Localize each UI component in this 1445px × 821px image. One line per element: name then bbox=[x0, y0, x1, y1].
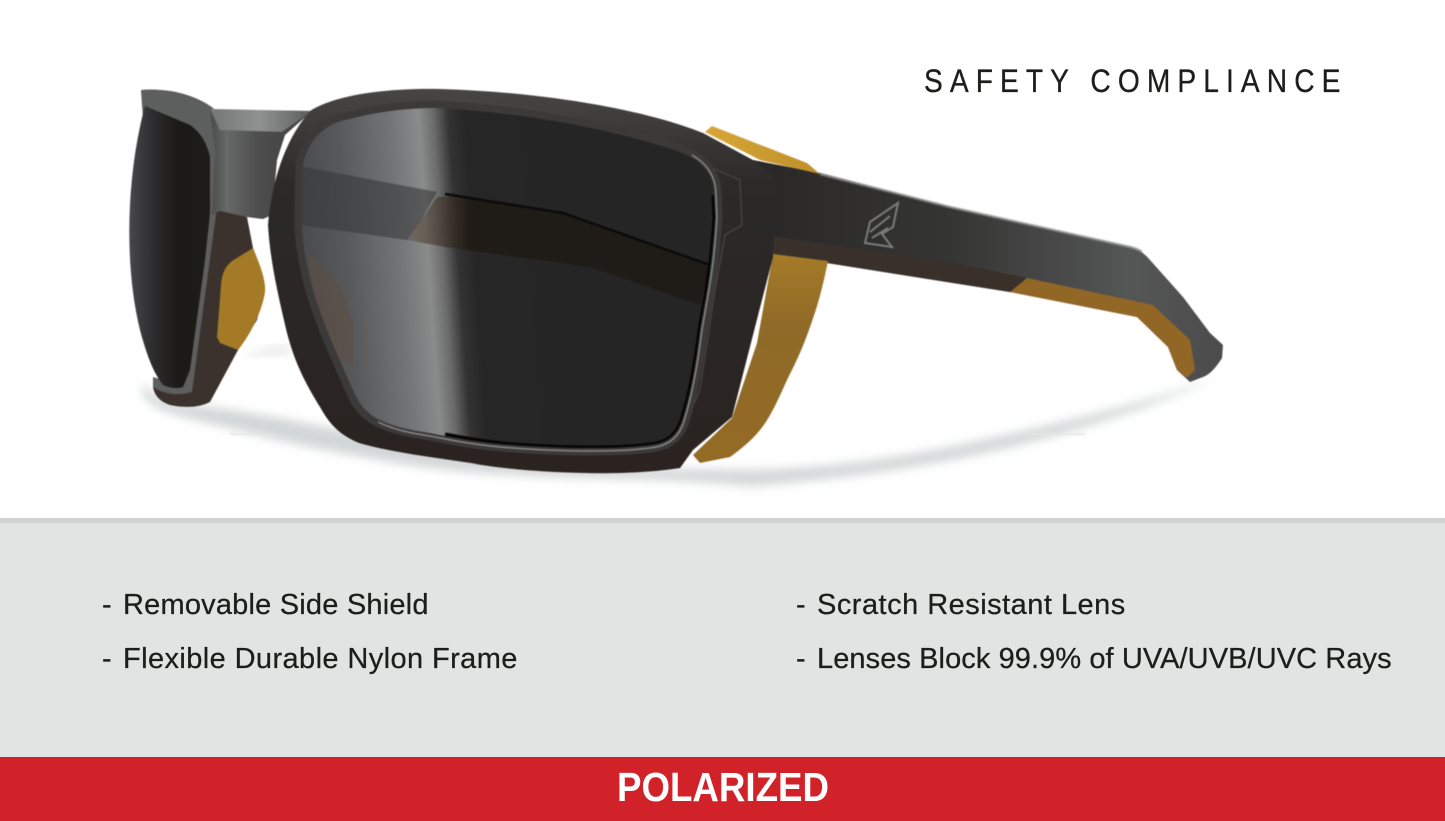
frame groove bbox=[430, 99, 742, 440]
side shield bbox=[693, 254, 828, 463]
feature panel bbox=[0, 518, 1445, 757]
lens dark edge bbox=[445, 195, 715, 448]
temple arm bbox=[747, 160, 1223, 382]
feature: UV protection: Lenses Block 99.9% of UVA/UVB/UVC Rays bbox=[817, 643, 1392, 675]
heading: SAFETY COMPLIANCE bbox=[924, 63, 1347, 99]
left lens frame bbox=[129, 90, 265, 407]
lens reflection: nose shadow bbox=[307, 250, 353, 367]
temple logo bbox=[865, 203, 898, 247]
nose pad bbox=[217, 248, 265, 350]
lens reflection: temple band left bbox=[300, 166, 437, 240]
temple lower band bbox=[747, 236, 1027, 292]
feature: nylon frame: - bbox=[102, 643, 112, 675]
ground shadow bbox=[142, 346, 1215, 486]
left lens bbox=[129, 106, 210, 388]
temple gold grip bbox=[1010, 278, 1195, 377]
bridge bbox=[210, 109, 312, 219]
lens reflection: temple band right bbox=[407, 196, 710, 305]
feature: scratch resistant: Scratch Resistant Lens bbox=[817, 589, 1126, 621]
lens highlight rim bbox=[378, 155, 717, 451]
main lens rim bbox=[302, 108, 715, 448]
main frame bbox=[268, 89, 777, 473]
lens reflection: black top edge bbox=[445, 194, 710, 265]
main lens bbox=[300, 108, 717, 451]
feature: nylon frame: Flexible Durable Nylon Frame bbox=[123, 643, 518, 675]
polarized banner bbox=[0, 757, 1445, 821]
feature: removable side shield: Removable Side Shield bbox=[123, 589, 429, 621]
feature: UV protection: - bbox=[796, 643, 806, 675]
top gold shield tab bbox=[705, 126, 820, 174]
illustration: polarized safety sunglasses bbox=[128, 88, 1224, 490]
feature: removable side shield: - bbox=[102, 589, 112, 621]
feature: scratch resistant: - bbox=[796, 589, 806, 621]
polarized banner: POLARIZED bbox=[617, 764, 830, 810]
